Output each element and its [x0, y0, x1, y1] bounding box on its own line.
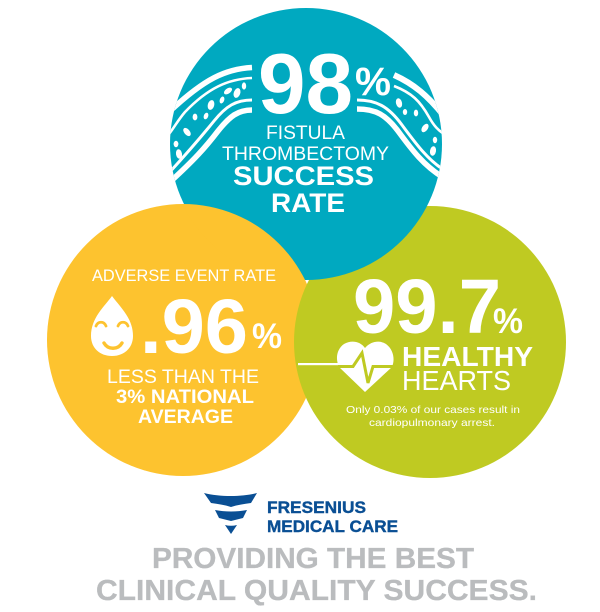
stat: .96 percent: %	[252, 317, 282, 356]
icon: left fistula vein	[166, 68, 252, 182]
text: less than the national average: AVERAGE	[138, 406, 233, 428]
stat: .96 percent: .96	[140, 284, 248, 370]
text: healthy hearts: HEALTHY	[402, 341, 533, 372]
text: fistula thrombectomy success rate: THROMBECTOMY	[222, 144, 389, 165]
stat: 99.7 percent: %	[493, 302, 523, 341]
logo: Fresenius Medical Care wordmark: MEDICAL CARE	[267, 517, 398, 536]
tagline: CLINICAL QUALITY SUCCESS.	[96, 575, 537, 607]
text: less than the national average: LESS THAN THE	[107, 366, 259, 388]
logo: Fresenius Medical Care wordmark	[267, 498, 398, 536]
text: fistula thrombectomy success rate: FISTULA	[266, 123, 345, 144]
tagline	[96, 543, 537, 607]
text: healthy hearts	[402, 341, 533, 396]
tagline: PROVIDING THE BEST	[152, 543, 475, 575]
panel: adverse circle overlap over teal	[184, 204, 306, 282]
text: healthy hearts: HEARTS	[402, 365, 511, 396]
text: cardiopulmonary note	[346, 404, 520, 429]
stat: 98 percent: 98	[258, 37, 353, 132]
panel: healthy hearts circle	[294, 206, 566, 478]
text: fistula thrombectomy success rate: RATE	[271, 188, 345, 218]
text: fistula thrombectomy success rate	[222, 123, 389, 218]
icon: right fistula vein	[357, 75, 444, 178]
text: cardiopulmonary note: Only 0.03% of our cases result in	[346, 404, 520, 416]
icon: smiling water drop	[91, 296, 133, 356]
panel: thrombectomy circle	[170, 8, 442, 280]
text: fistula thrombectomy success rate: SUCCESS	[233, 161, 374, 191]
logo: Fresenius Medical Care wordmark: FRESENIUS	[267, 498, 366, 517]
text: less than the national average	[107, 366, 259, 428]
stat: 98 percent: %	[355, 60, 391, 104]
icon: heart with pulse line	[298, 342, 395, 392]
heading: adverse event rate: ADVERSE EVENT RATE	[92, 267, 276, 285]
logo: Fresenius chevrons	[204, 493, 257, 534]
stat: 99.7 percent: 99.7	[353, 264, 501, 350]
panel: adverse event rate circle	[47, 204, 319, 476]
text: cardiopulmonary note: cardiopulmonary arrest.	[369, 417, 495, 429]
text: less than the national average: 3% NATIONAL	[116, 386, 254, 408]
